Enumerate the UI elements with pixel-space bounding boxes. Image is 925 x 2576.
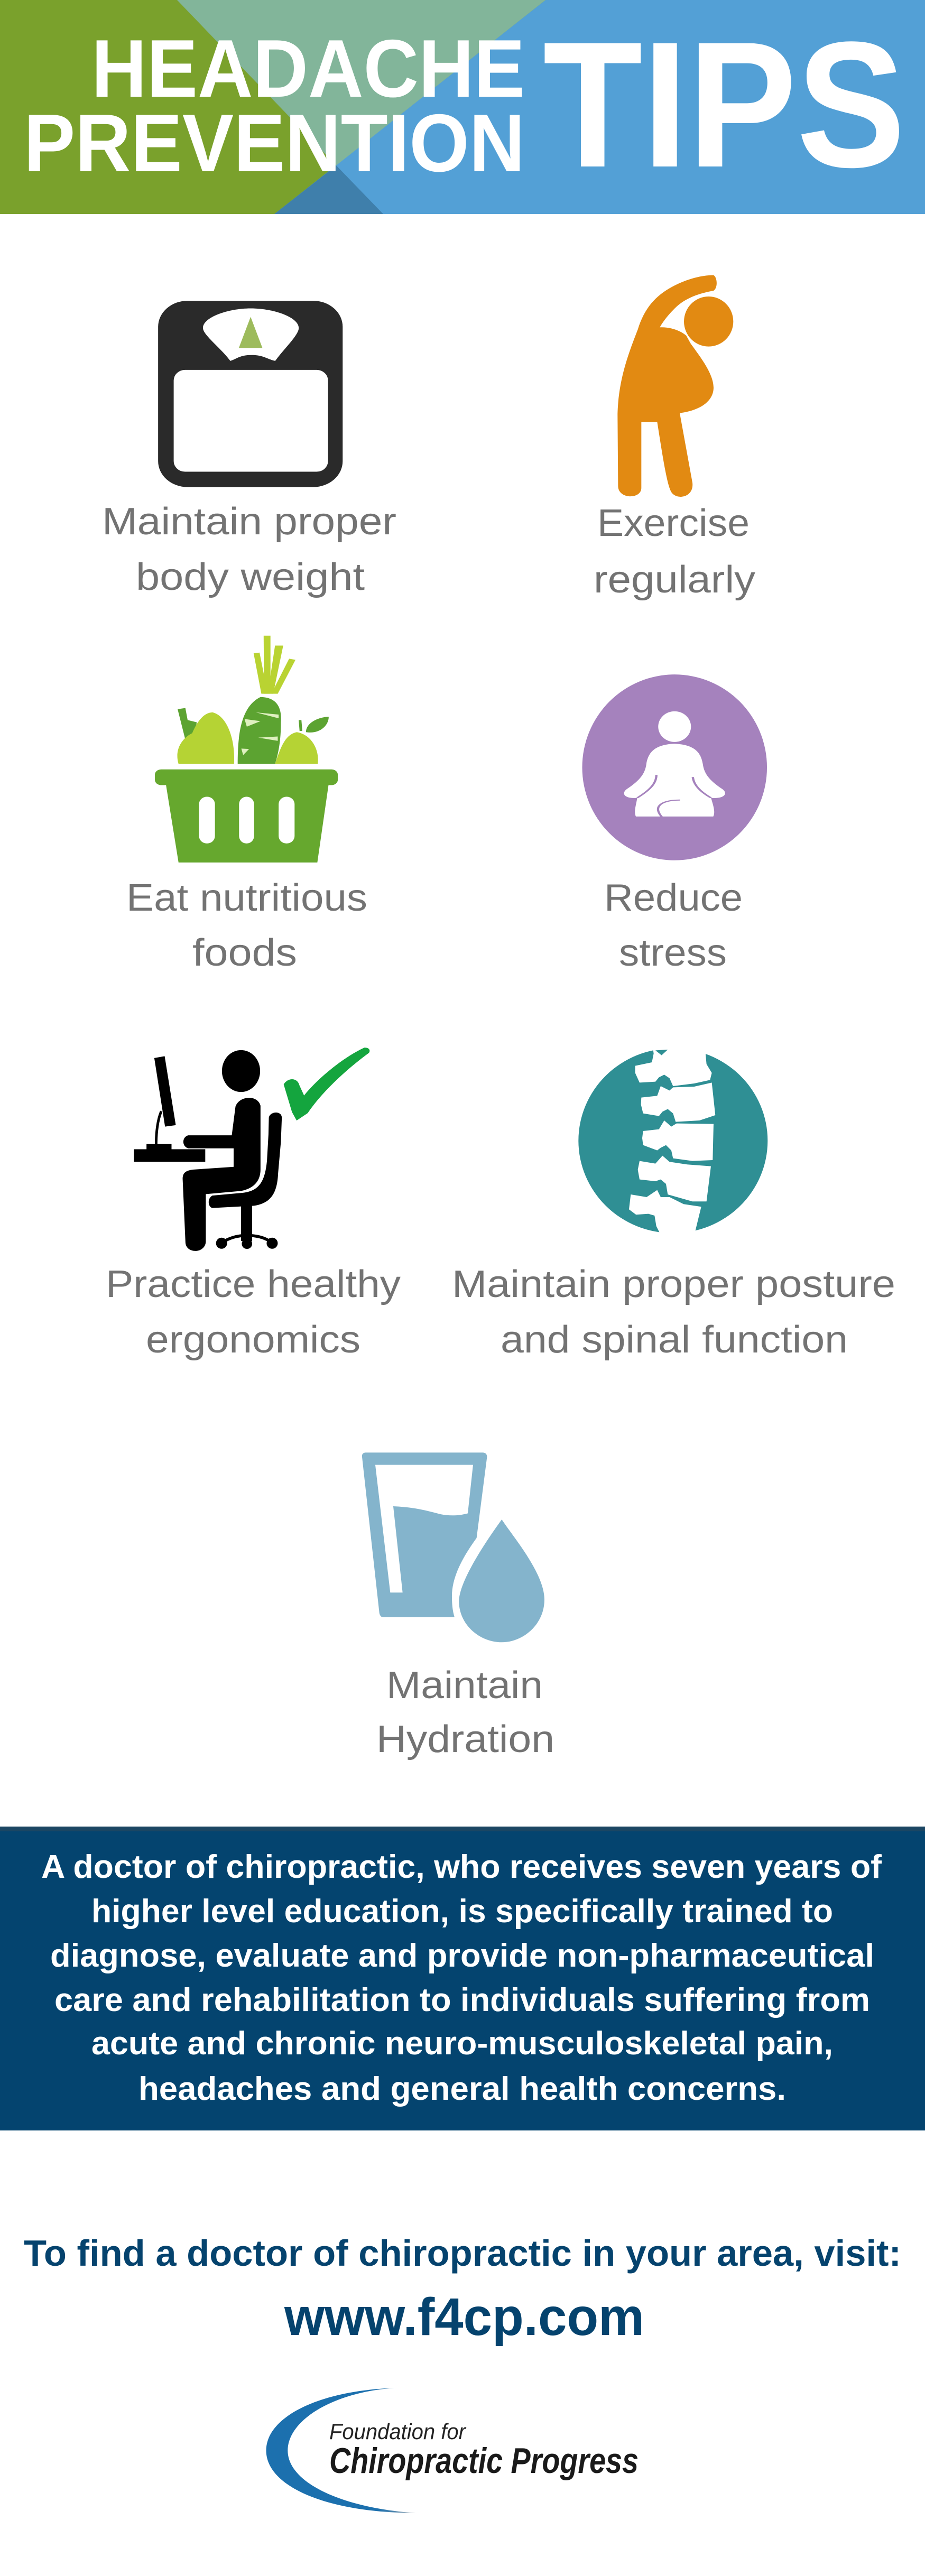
label xyxy=(376,1664,554,1760)
label: regularly xyxy=(594,559,755,601)
label xyxy=(604,877,743,974)
tip: maintain proper body weight xyxy=(102,301,396,598)
icon: stretching person xyxy=(617,275,733,497)
logo: Foundation for Chiropractic Progress: Foundation for xyxy=(329,2419,467,2444)
description text: headaches and general health concerns. xyxy=(138,2071,786,2107)
label: Maintain proper posture xyxy=(452,1263,895,1305)
label: Exercise xyxy=(597,502,750,544)
tip: exercise regularly xyxy=(594,275,755,601)
label: Eat nutritious xyxy=(126,877,367,919)
panel: doctor of chiropractic description xyxy=(0,1827,925,2130)
label: and spinal function xyxy=(501,1319,848,1361)
logo: Foundation for Chiropractic Progress xyxy=(266,2388,639,2513)
label xyxy=(126,877,367,974)
label xyxy=(102,501,396,598)
icon: person seated at computer xyxy=(134,1048,369,1251)
description text: higher level education, is specifically trained to xyxy=(91,1893,833,1930)
label xyxy=(452,1263,895,1361)
label: stress xyxy=(619,932,727,974)
label: foods xyxy=(192,932,297,974)
label xyxy=(594,502,755,601)
icon: green check mark xyxy=(284,1048,369,1120)
icon: meditation figure xyxy=(582,674,767,860)
label: Practice healthy xyxy=(106,1263,401,1305)
tip: practice healthy ergonomics xyxy=(106,1048,401,1361)
description text: diagnose, evaluate and provide non-pharmaceutical xyxy=(50,1938,874,1974)
icon: bathroom scale xyxy=(158,301,343,487)
label: Maintain xyxy=(386,1664,543,1707)
label: Maintain proper xyxy=(102,501,396,543)
tip: maintain hydration xyxy=(362,1452,554,1760)
label: Hydration xyxy=(376,1718,554,1760)
label: Reduce xyxy=(604,877,743,919)
icon: vegetable basket xyxy=(155,636,338,863)
tip: maintain proper posture and spinal function xyxy=(452,1048,895,1361)
label xyxy=(106,1263,401,1361)
logo: Foundation for Chiropractic Progress: Chiropractic Progress xyxy=(329,2441,639,2481)
title: HEADACHE xyxy=(91,23,525,114)
description text xyxy=(41,1849,882,2107)
label: body weight xyxy=(136,556,365,598)
description text: care and rehabilitation to individuals suffering from xyxy=(54,1982,870,2018)
tip: reduce stress xyxy=(582,674,767,974)
description text: A doctor of chiropractic, who receives seven years of xyxy=(41,1849,882,1885)
tip: eat nutritious foods xyxy=(126,636,367,974)
description text: acute and chronic neuro-musculoskeletal pain, xyxy=(91,2025,833,2062)
website url: www.f4cp.com xyxy=(284,2287,644,2347)
call to action text: To find a doctor of chiropractic in your area, visit: xyxy=(24,2232,901,2274)
icon: glass of water and drop xyxy=(362,1452,544,1642)
title: PREVENTION xyxy=(24,97,525,189)
label: ergonomics xyxy=(146,1319,360,1361)
title xyxy=(24,4,905,205)
icon: spine in circle xyxy=(578,1048,767,1235)
header banner xyxy=(0,0,925,214)
